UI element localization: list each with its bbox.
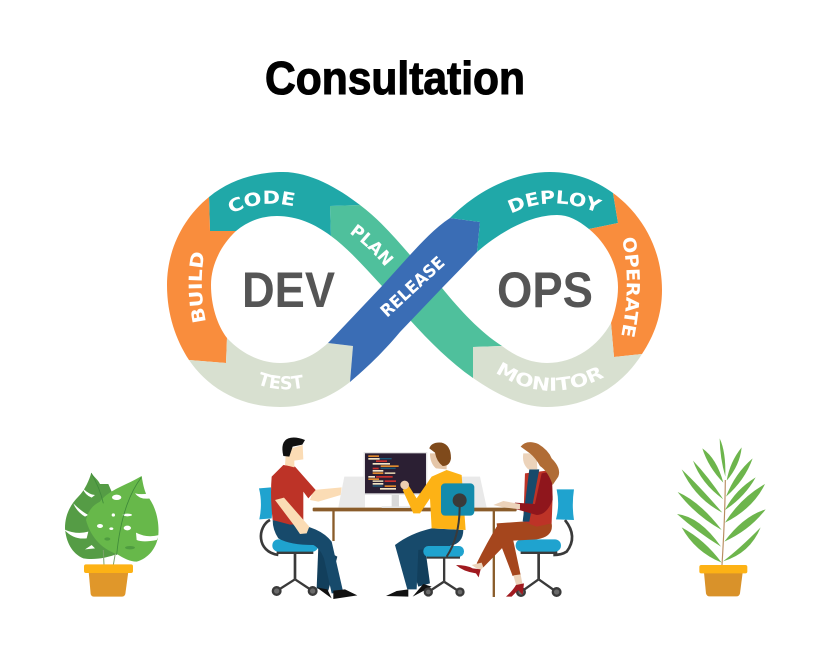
laptop left: [338, 477, 365, 507]
segment: code: CODE: [228, 190, 295, 212]
label: OPS: OPS: [497, 262, 593, 318]
left chair: [259, 487, 318, 596]
segment: build: BUILD: [188, 252, 206, 322]
label: DEV: DEV: [242, 262, 336, 318]
desk: [313, 508, 517, 597]
pot: [699, 565, 747, 596]
segment: plan: PLAN: [350, 224, 394, 266]
right plant: palm: [677, 438, 766, 596]
front leaf holes: [97, 493, 159, 549]
segment: operate: [589, 193, 662, 357]
left plant: monstera: [64, 473, 159, 597]
segment: operate: OPERATE: [622, 238, 640, 337]
leaf cuts: [64, 488, 95, 549]
segment: code: [209, 172, 360, 236]
DevOps infinity loop: [167, 172, 662, 407]
title: Consultation: [265, 52, 525, 104]
right chair: [516, 489, 574, 597]
pot: [84, 564, 133, 597]
back leaf: [65, 473, 118, 559]
stems: [103, 550, 115, 565]
segment: plan: [330, 205, 502, 378]
segment: test: [189, 338, 353, 407]
segment: deploy: [450, 172, 618, 252]
segment: monitor: MONITOR: [496, 362, 604, 391]
monitor with code: [364, 452, 427, 508]
segment: release: [328, 218, 480, 382]
segment: monitor: [473, 323, 642, 407]
laptop right: [460, 477, 487, 507]
centre chair: [423, 483, 474, 597]
person: man in red shirt: [271, 437, 357, 599]
segment: test: TEST: [260, 372, 302, 390]
person: woman in red jacket: [456, 442, 559, 597]
team at desk illustration: [259, 437, 574, 599]
front leaf: [86, 476, 159, 562]
midrib: [91, 473, 141, 555]
fronds: [677, 438, 766, 563]
stem: [722, 480, 725, 565]
segment: release: RELEASE: [380, 256, 445, 317]
segment: build: [167, 197, 236, 363]
person: man in yellow shirt: [386, 443, 466, 597]
segment: deploy: DEPLOY: [508, 190, 602, 213]
